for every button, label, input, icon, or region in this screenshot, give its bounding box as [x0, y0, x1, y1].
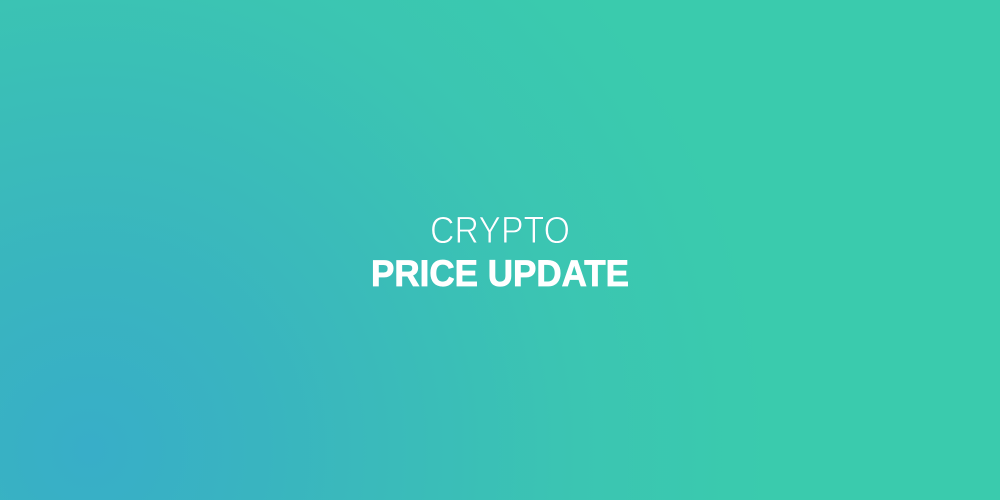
title line: CRYPTO: CRYPTO [430, 210, 570, 252]
title line: PRICE UPDATE: PRICE UPDATE [371, 253, 629, 294]
